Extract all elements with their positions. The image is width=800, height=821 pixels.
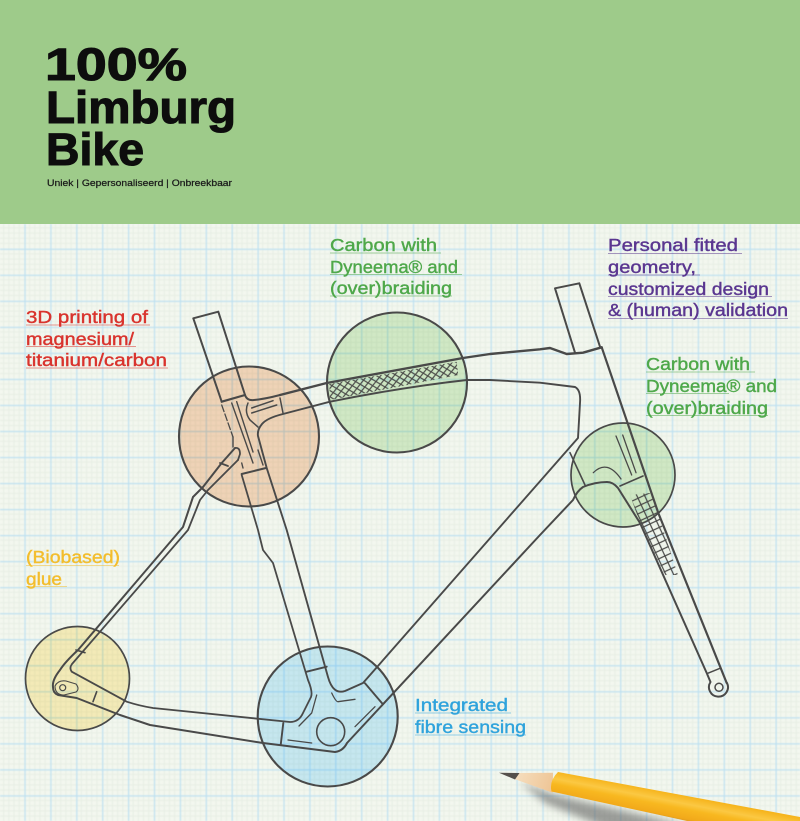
seat tube top — [193, 312, 280, 402]
highlight circle: glue dropout — [26, 626, 130, 730]
title: Bike — [46, 124, 144, 175]
braided section fork — [631, 493, 678, 575]
circle outlines — [26, 312, 675, 786]
highlight circle: 3D printing joint — [179, 366, 319, 506]
highlight circle: fibre sensing bottom bracket — [258, 646, 398, 786]
label: carbon with Dyneema top: (over)braiding — [330, 278, 452, 298]
label: 3D printing: titanium/carbon — [26, 350, 167, 370]
pencil body — [551, 772, 800, 821]
label: integrated fibre sensing: Integrated — [415, 695, 508, 715]
braided section top tube — [329, 362, 458, 400]
label: personal fitted geometry: & (human) validation — [608, 300, 788, 320]
head lug details — [570, 453, 643, 486]
fork dropout — [715, 683, 723, 691]
bike frame sketch — [26, 283, 728, 786]
highlight circle: top tube braiding — [327, 312, 467, 452]
tagline: Uniek | Gepersonaliseerd | Onbreekbaar — [47, 178, 232, 189]
title: Limburg — [46, 82, 236, 133]
label: personal fitted geometry — [608, 235, 788, 320]
label: integrated fibre sensing — [415, 695, 526, 737]
label: 3D printing: 3D printing of — [26, 307, 148, 327]
title: 100% — [45, 39, 187, 90]
label: carbon with Dyneema top: Carbon with — [330, 235, 437, 255]
pencil shadow — [520, 782, 690, 821]
bottom bracket lug details — [281, 667, 383, 745]
label: carbon with Dyneema fork: Carbon with — [646, 354, 750, 374]
label: carbon with Dyneema fork: (over)braiding — [646, 398, 768, 418]
pencil wood tip — [515, 773, 553, 793]
seat clamp line — [222, 395, 245, 402]
label: biobased glue: (Biobased) — [26, 547, 120, 567]
seat tube front edge into bottom bracket and down tube top edge — [258, 380, 580, 692]
pencil — [499, 772, 800, 821]
graph paper background — [0, 224, 800, 821]
seat lug details — [242, 468, 266, 474]
label: 3D printing: magnesium/ — [26, 329, 134, 349]
pencil lead — [499, 773, 520, 780]
seat stay tip — [220, 448, 240, 466]
label: personal fitted geometry: Personal fitted — [608, 235, 738, 255]
label: carbon with Dyneema fork — [646, 354, 777, 418]
top tube top edge — [280, 347, 602, 395]
title — [45, 39, 236, 175]
fork front edge — [602, 347, 727, 683]
label: carbon with Dyneema top: Dyneema® and — [330, 257, 458, 277]
head tube — [555, 283, 600, 353]
seat tube rear thin edge and chain stay top — [70, 460, 312, 722]
label: personal fitted geometry: geometry, — [608, 257, 696, 277]
label: carbon with Dyneema fork: Dyneema® and — [646, 376, 777, 396]
seat stay and chain stay lower edge into down tube — [53, 448, 728, 752]
header banner — [0, 0, 800, 224]
rear dropout details — [76, 650, 97, 702]
label: biobased glue — [26, 547, 120, 589]
label: integrated fibre sensing: fibre sensing — [415, 717, 526, 737]
label: carbon with Dyneema top — [330, 235, 462, 298]
label: personal fitted geometry: customized design — [608, 279, 769, 299]
label: 3D printing — [26, 307, 168, 370]
highlight circle: fork braiding — [571, 423, 675, 527]
label: biobased glue: glue — [26, 569, 62, 589]
